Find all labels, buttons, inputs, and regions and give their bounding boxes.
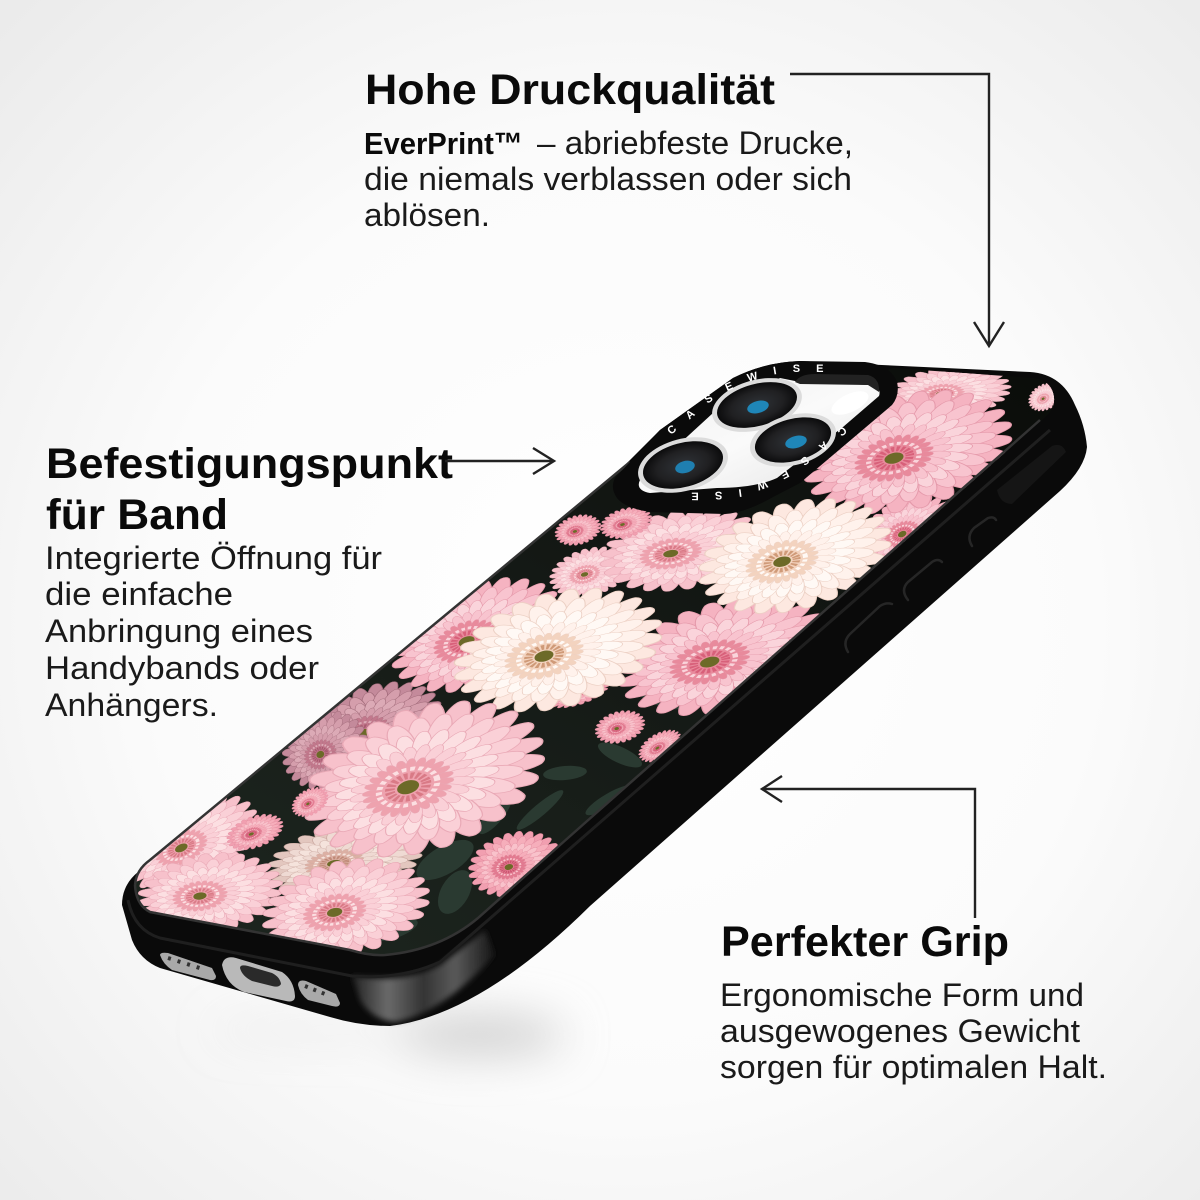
lens: right bbox=[744, 404, 842, 476]
island frame bbox=[613, 361, 898, 514]
callout: Perfekter Grip bbox=[720, 918, 1107, 1085]
island brand text lower: CASEWISE bbox=[692, 428, 846, 500]
USB port bbox=[222, 957, 295, 1001]
body text bbox=[45, 540, 382, 723]
speaker right bbox=[298, 980, 340, 1007]
screen lip highlight bbox=[135, 420, 1040, 955]
body text: sorgen für optimalen Halt. bbox=[720, 1049, 1107, 1085]
callout: Befestigungspunkt für Band bbox=[45, 440, 453, 723]
flash highlight bbox=[828, 386, 872, 420]
foliage bbox=[370, 687, 683, 946]
body text: Anhängers. bbox=[45, 687, 218, 723]
body text: ablösen. bbox=[364, 197, 490, 233]
heading: Befestigungspunkt bbox=[46, 440, 453, 488]
body text bbox=[720, 977, 1107, 1085]
body text: Anbringung eines bbox=[45, 613, 313, 649]
body text: – abriebfeste Drucke, bbox=[537, 125, 853, 161]
body text: Handybands oder bbox=[45, 650, 319, 686]
camera window bbox=[639, 378, 880, 493]
flowers bbox=[106, 361, 1067, 972]
arrow: grip bbox=[762, 776, 975, 918]
body text: EverPrint™ bbox=[364, 126, 523, 161]
heading: Hohe Druckqualität bbox=[365, 66, 775, 114]
heading bbox=[46, 440, 453, 539]
phone shadow bbox=[210, 1015, 565, 1055]
case rim bbox=[128, 430, 1050, 977]
phone case with floral print bbox=[122, 361, 1087, 1026]
arrow: strap attachment bbox=[445, 448, 554, 474]
speaker left bbox=[160, 953, 216, 980]
frame inner shade bbox=[795, 374, 879, 392]
island brand text: CASEWISE bbox=[668, 364, 824, 434]
side buttons bbox=[845, 517, 996, 652]
lens: top bbox=[706, 369, 808, 441]
body text bbox=[364, 125, 853, 233]
heading: für Band bbox=[46, 491, 228, 539]
body text: Integrierte Öffnung für bbox=[45, 540, 382, 576]
side switch highlight bbox=[997, 445, 1066, 504]
camera island bbox=[613, 361, 898, 514]
case body bbox=[122, 361, 1087, 1026]
arrow: print quality bbox=[790, 74, 1004, 346]
bottom ports bbox=[160, 953, 340, 1007]
body text: die niemals verblassen oder sich bbox=[364, 161, 852, 197]
heading: Perfekter Grip bbox=[721, 918, 1009, 966]
lens: left bbox=[632, 428, 734, 502]
callout: Hohe Druckqualität bbox=[364, 66, 853, 233]
corner reflection bbox=[352, 930, 495, 1022]
body text: Ergonomische Form und bbox=[720, 977, 1084, 1013]
body text: ausgewogenes Gewicht bbox=[720, 1013, 1080, 1049]
body text: die einfache bbox=[45, 576, 233, 612]
screen print area bbox=[106, 360, 1070, 972]
